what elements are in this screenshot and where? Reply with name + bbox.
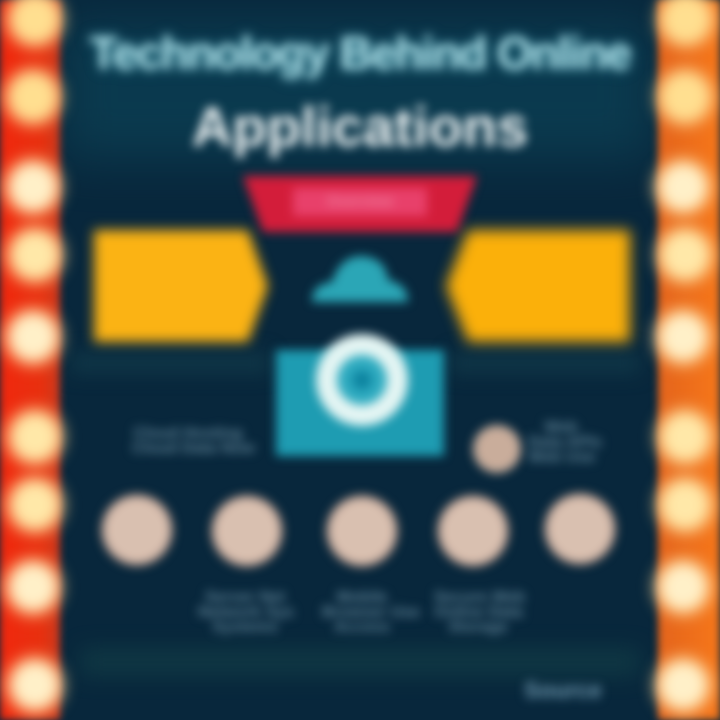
red ribbon heading bbox=[237, 168, 483, 240]
text block: left caption: Cloud Hosting bbox=[133, 425, 243, 442]
icon: cloud bbox=[306, 250, 414, 309]
text block: caption 2: Mobile bbox=[337, 589, 387, 606]
red ribbon heading: Overview bbox=[327, 193, 393, 210]
text block: left caption bbox=[129, 424, 258, 458]
row of five circles bbox=[94, 486, 624, 574]
text block: caption 1: Network Sys bbox=[198, 604, 294, 621]
text block: caption 1: Server Net bbox=[205, 589, 285, 606]
text block: right caption bbox=[525, 417, 604, 466]
panel: teal screen bbox=[269, 343, 451, 463]
title line 1: Technology Behind Online bbox=[90, 27, 630, 79]
title line 2: Applications bbox=[192, 95, 528, 158]
footer band bbox=[80, 648, 640, 676]
icon: white ring bbox=[308, 326, 416, 434]
text block: right caption: Web Use bbox=[528, 449, 595, 466]
text block: caption 3: Secure Web bbox=[434, 589, 525, 606]
text block: right caption: Web bbox=[544, 419, 578, 436]
icon: small beige dot bbox=[473, 425, 521, 473]
text block: caption 3: Storage bbox=[448, 619, 508, 636]
left border lights bbox=[0, 0, 76, 720]
right border strip bbox=[658, 0, 720, 720]
text block: caption 2 bbox=[318, 587, 422, 636]
text block: caption 2: Access bbox=[334, 619, 390, 636]
footer note: Source bbox=[524, 677, 602, 703]
text block: caption 2: Browser Use bbox=[322, 604, 420, 621]
panel: left yellow arrow bbox=[84, 220, 276, 352]
background glow bands bbox=[60, 20, 655, 160]
text block: caption 1 bbox=[194, 588, 296, 638]
text block: right caption: Data APIs bbox=[528, 434, 602, 451]
panel: right yellow arrow bbox=[436, 218, 642, 354]
text block: left caption: Cloud Data Now bbox=[132, 440, 255, 457]
text block: caption 1: Systems bbox=[212, 619, 278, 636]
left border strip bbox=[0, 0, 60, 720]
text block: caption 3: Online Data bbox=[434, 604, 523, 621]
right border lights bbox=[642, 0, 720, 720]
text block: caption 3 bbox=[431, 587, 528, 638]
